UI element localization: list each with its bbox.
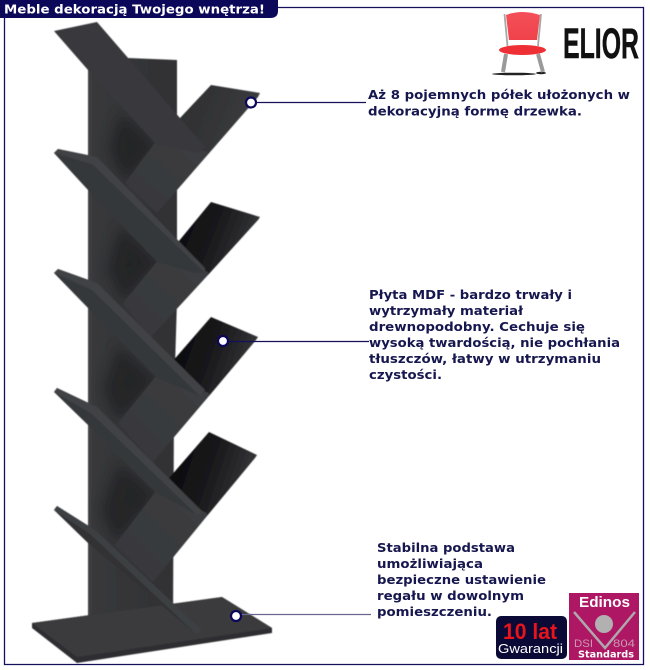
right shelf 2 <box>165 202 260 275</box>
tree bookshelf <box>32 22 272 663</box>
badge: 10 year warranty: Gwarancji <box>498 641 563 656</box>
left shelf 1 <box>54 22 205 153</box>
badge: Edinos DSI 804 standards: DSI <box>574 638 593 650</box>
shelf body 3 <box>118 375 209 462</box>
badge: 10 year warranty: 10 lat <box>503 619 558 644</box>
callout: stable base: Stabilna podstawa <box>377 540 515 555</box>
badge: Edinos DSI 804 standards <box>569 593 639 660</box>
callout: MDF board <box>218 287 620 382</box>
badge: Edinos DSI 804 standards: 804 <box>613 638 635 650</box>
left shelf 2 <box>54 149 205 273</box>
shelf body 4 <box>115 490 207 582</box>
callout: shelves: Aż 8 pojemnych półek ułożonych w <box>368 87 630 102</box>
callout: stable base: bezpieczne ustawienie <box>377 572 546 587</box>
callout: MDF board: czystości. <box>369 367 442 382</box>
central trunk panel <box>88 58 177 625</box>
callout: stable base <box>231 540 546 621</box>
shelf body 1 <box>125 140 208 213</box>
badge: 10 year warranty <box>496 616 567 659</box>
logo: chair icon <box>492 12 546 75</box>
base board <box>32 597 272 663</box>
callout: stable base: pomieszczeniu. <box>377 604 492 619</box>
callout: MDF board: wytrzymały materiał <box>369 303 523 318</box>
left shelf 3 <box>54 269 205 396</box>
callout: shelves <box>246 87 630 118</box>
callout: MDF board: tłuszczów, łatwy w utrzymaniu <box>369 351 601 366</box>
right shelf 1 <box>165 85 260 155</box>
badge: Edinos DSI 804 standards: Edinos <box>579 594 630 611</box>
title banner: Meble dekoracją Twojego wnętrza! <box>4 2 265 16</box>
shelf body 2 <box>123 258 208 338</box>
badge: Edinos DSI 804 standards: Standards <box>578 650 634 660</box>
callout: MDF board: wysoką twardością, nie pochłania <box>369 335 620 350</box>
left shelf 5 <box>54 506 202 635</box>
right shelf 4 <box>163 432 257 516</box>
callout: MDF board: drewnopodobny. Cechuje się <box>369 319 585 334</box>
callout: shelves: dekoracyjną formę drzewka. <box>368 104 582 118</box>
callout: stable base: umożliwiająca <box>377 556 483 571</box>
callout: MDF board: Płyta MDF - bardzo trwały i <box>369 287 572 302</box>
trunk shadows under shelves <box>100 112 158 545</box>
callout: stable base: regału w dowolnym <box>377 588 524 603</box>
right shelf 3 <box>165 317 258 396</box>
left shelf 4 <box>54 388 203 515</box>
